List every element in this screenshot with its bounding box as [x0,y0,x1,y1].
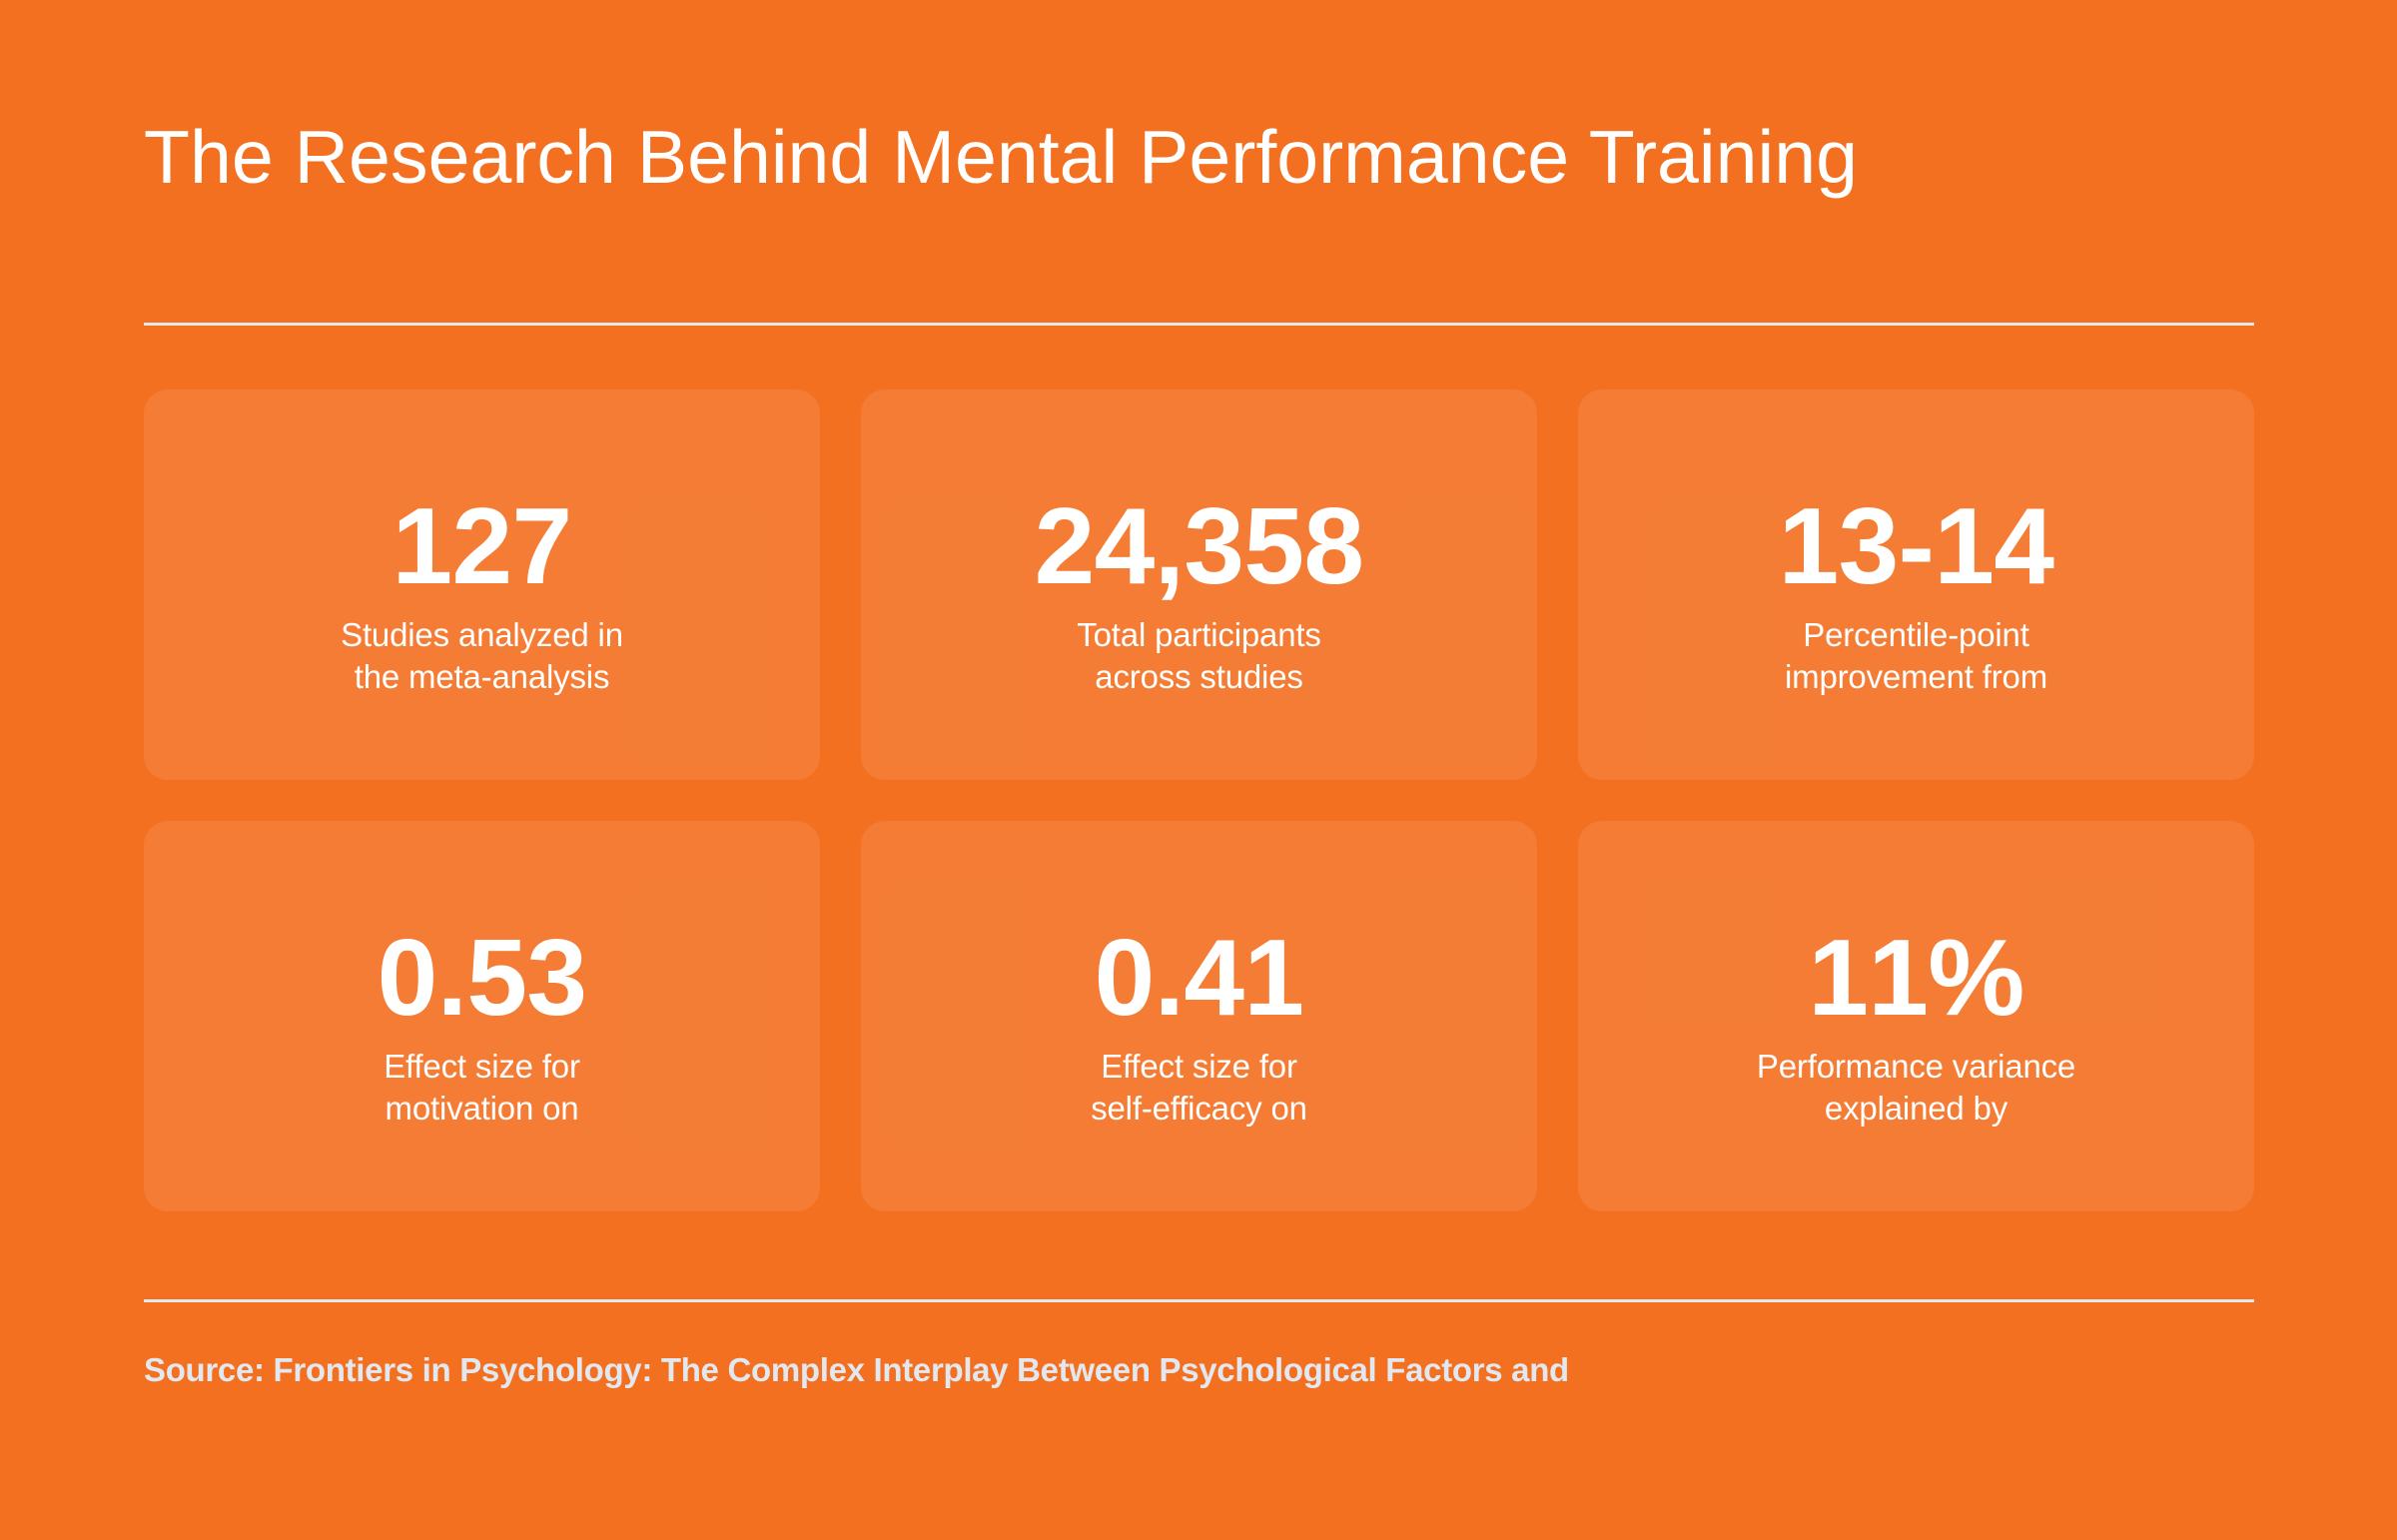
panel: percentile-point improvement [1578,389,2254,780]
stat: 127: 127 [392,485,572,607]
panel: motivation effect size [144,821,820,1211]
label: total participants: across studies [1095,658,1303,695]
label: self-efficacy effect size [1091,1048,1307,1127]
label: motivation effect size: Effect size for [384,1048,580,1085]
label: performance variance: explained by [1825,1090,2007,1127]
label: percentile-point improvement: improvement from [1785,658,2047,695]
label: studies analyzed [341,616,623,695]
stat: 0.53: 0.53 [378,917,586,1039]
stat: 11%: 11% [1808,917,2024,1039]
title: The Research Behind Mental Performance Training [144,115,1858,199]
label: percentile-point improvement: Percentile-point [1803,616,2029,653]
panel: self-efficacy effect size [861,821,1537,1211]
label: self-efficacy effect size: self-efficacy on [1091,1090,1307,1127]
label: total participants: Total participants [1077,616,1321,653]
label: studies analyzed: Studies analyzed in [341,616,623,653]
stat: 13-14: 13-14 [1779,485,2053,607]
label: studies analyzed: the meta-analysis [355,658,609,695]
panel: performance variance [1578,821,2254,1211]
stat: 0.41: 0.41 [1095,917,1303,1039]
stat: 24,358: 24,358 [1035,485,1363,607]
label: performance variance: Performance variance [1757,1048,2075,1085]
label: total participants [1077,616,1321,695]
label: performance variance [1757,1048,2075,1127]
label: percentile-point improvement [1785,616,2047,695]
panel: studies analyzed [144,389,820,780]
label: motivation effect size [384,1048,580,1127]
panel: total participants [861,389,1537,780]
source note: Source: Frontiers in Psychology: The Complex Interplay Between Psychological Factors and [144,1351,1569,1388]
label: self-efficacy effect size: Effect size for [1101,1048,1297,1085]
label: motivation effect size: motivation on [386,1090,578,1127]
